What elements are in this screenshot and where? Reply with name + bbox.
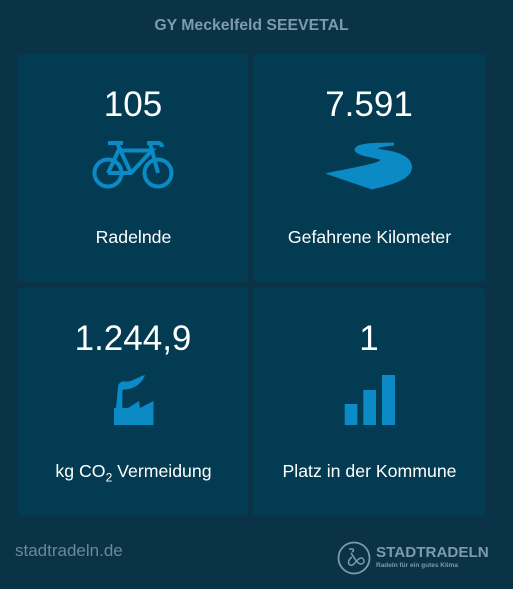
icon: bicycle — [92, 141, 174, 188]
website link text: stadtradeln.de — [15, 541, 123, 560]
icon: winding road — [325, 142, 412, 190]
value: Gefahrene Kilometer: 7.591 — [325, 85, 413, 124]
logo icon — [338, 542, 370, 574]
label: Gefahrene Kilometer: Gefahrene Kilometer — [288, 227, 451, 247]
panel: Radelnde — [18, 54, 248, 282]
icon: factory — [114, 375, 154, 425]
logo tagline: Radeln für ein gutes Klima — [376, 562, 458, 569]
icon: bar chart — [344, 375, 395, 425]
panel: Gefahrene Kilometer — [253, 54, 485, 282]
logo: STADTRADELN — [338, 542, 489, 574]
logo wordmark: STADTRADELN — [376, 544, 489, 561]
value: CO2 Vermeidung: 1.244,9 — [75, 319, 191, 358]
panel: Platz in der Kommune — [253, 288, 485, 516]
label: Radelnde: Radelnde — [96, 227, 171, 247]
label: CO2 Vermeidung: kg CO2 Vermeidung — [55, 461, 212, 485]
value: Platz in der Kommune: 1 — [359, 319, 379, 358]
value: Radelnde: 105 — [104, 85, 162, 124]
title: GY Meckelfeld SEEVETAL — [154, 17, 349, 34]
label: Platz in der Kommune: Platz in der Kommune — [282, 461, 456, 481]
panel: CO2 Vermeidung — [18, 288, 248, 516]
